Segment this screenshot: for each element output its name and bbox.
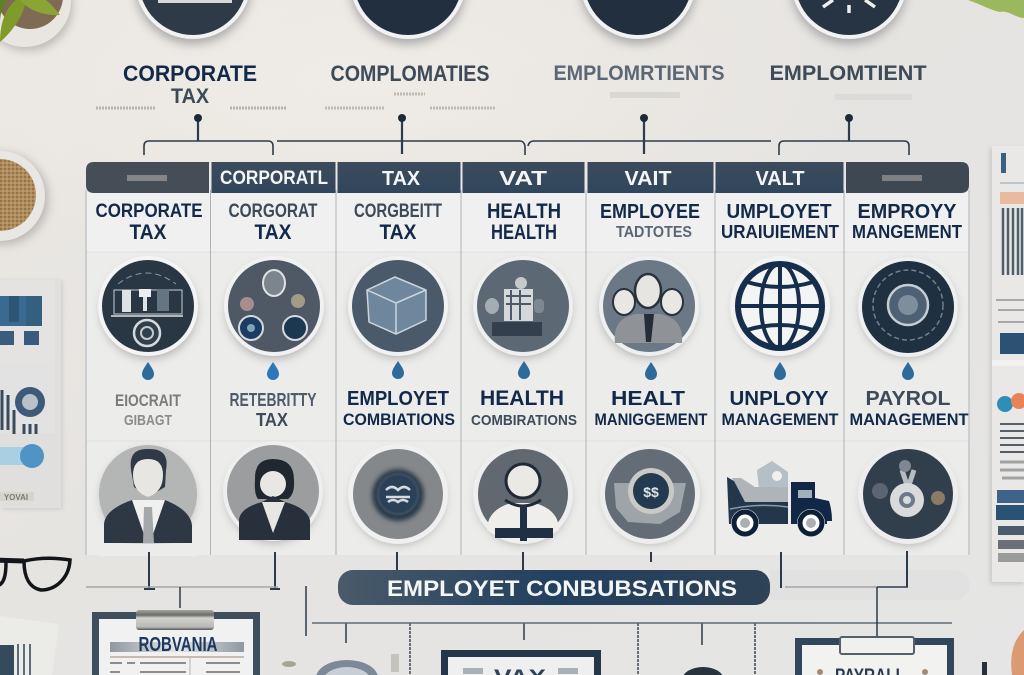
clipboard: tax bbox=[441, 650, 601, 675]
icon: top circle 1 bbox=[135, 0, 251, 44]
left side document bbox=[0, 279, 62, 509]
heading: emplomtient: EMPLOMTIENT bbox=[770, 62, 927, 85]
row 2 labels: HEALT bbox=[611, 388, 685, 410]
column titles: CORPORATE bbox=[96, 201, 202, 222]
row 2 labels: PAYROL bbox=[866, 388, 950, 410]
header row: TAX bbox=[382, 168, 421, 190]
header row bbox=[86, 162, 969, 193]
column titles: URAIUIEMENT bbox=[721, 222, 839, 242]
row 2 labels bbox=[115, 387, 969, 430]
icon: truck bbox=[727, 461, 832, 537]
header row: CORPORATL bbox=[220, 168, 328, 189]
connectors below table bbox=[86, 551, 952, 675]
icon: network circle bbox=[224, 256, 324, 358]
icon: woman bbox=[223, 441, 323, 542]
icon: man in suit bbox=[98, 445, 198, 556]
icon: plant top left bbox=[0, 0, 72, 50]
icon: bank building circle bbox=[473, 256, 573, 357]
left side document: YOVAI bbox=[4, 493, 28, 502]
icon: tools circle bbox=[858, 444, 958, 544]
icon: people circle bbox=[599, 256, 699, 357]
water drops bbox=[142, 361, 914, 380]
heading: complomaties: COMPLOMATIES bbox=[330, 61, 490, 86]
icon: hex badge circle: $$ bbox=[643, 484, 659, 500]
pale track behind banner bbox=[770, 570, 970, 600]
column titles: UMPLOYET bbox=[726, 201, 832, 223]
column titles: EMPROYY bbox=[858, 201, 957, 223]
heading: corporate tax bbox=[96, 61, 286, 108]
column titles bbox=[96, 200, 962, 244]
heading: complomaties bbox=[325, 61, 496, 108]
icon: box circle bbox=[348, 256, 448, 357]
column titles: CORGBEITT bbox=[354, 201, 442, 222]
icon: coffee cup left bbox=[0, 151, 48, 244]
table panel bbox=[86, 190, 969, 555]
column titles: TAX bbox=[380, 221, 416, 244]
row 2 labels: TAX bbox=[256, 410, 288, 430]
row 2 labels: MANAGEMENT bbox=[722, 410, 839, 429]
eyeglasses bbox=[0, 558, 70, 590]
row 2 labels: GIBAGT bbox=[124, 412, 172, 429]
row 2 labels: COMBIATIONS bbox=[343, 410, 455, 429]
row 2 labels: EMPLOYET bbox=[347, 388, 449, 410]
heading: corporate tax: CORPORATE bbox=[123, 61, 257, 86]
heading: emplomatients: EMPLOMRTIENTS bbox=[554, 62, 724, 85]
icon: building circle bbox=[98, 256, 198, 358]
header row: VAIT bbox=[624, 168, 672, 190]
icon: hex badge circle bbox=[600, 444, 700, 544]
icon: top circle 2 bbox=[350, 0, 466, 44]
column titles: TADTOTES bbox=[616, 224, 692, 241]
column titles: HEALTH bbox=[491, 221, 557, 244]
icon: top circle 4 bbox=[791, 0, 907, 44]
column titles: TAX bbox=[254, 221, 292, 244]
header row: VALT bbox=[756, 168, 804, 190]
heading: corporate tax: TAX bbox=[171, 85, 209, 108]
icon: gear badge circle bbox=[858, 257, 958, 357]
icon: person in shirt bbox=[473, 444, 573, 544]
right side documents bbox=[990, 146, 1024, 584]
row 2 labels: MANAGEMENT bbox=[850, 410, 969, 429]
row 2 labels: RETEBRITTY bbox=[230, 390, 316, 410]
banner: employee contributions: EMPLOYET CONBUBSATIONS bbox=[387, 576, 737, 601]
row 2 labels: MANIGGEMENT bbox=[594, 410, 708, 429]
column titles: CORGORAT bbox=[228, 201, 318, 222]
icon: top circle 3 bbox=[580, 0, 696, 44]
clipboard: payroll bbox=[795, 637, 954, 675]
left bottom document bbox=[0, 616, 59, 675]
clipboard: Romania bbox=[92, 610, 260, 675]
banner: employee contributions bbox=[338, 570, 770, 605]
column titles: MANGEMENT bbox=[852, 222, 962, 242]
icon: person head stub bbox=[682, 667, 724, 675]
connector tree top bbox=[144, 114, 909, 155]
column titles: EMPLOYEE bbox=[600, 201, 700, 223]
row 2 labels: HEALTH bbox=[480, 387, 564, 410]
icon: plant top right bbox=[968, 0, 1024, 18]
pen and side objects bbox=[982, 630, 1024, 675]
row 2 labels: UNPLOYY bbox=[730, 388, 829, 410]
row 2 labels: COMBIRATIONS bbox=[471, 412, 577, 429]
icon: coin badge circle bbox=[348, 444, 448, 544]
header row: VAT bbox=[499, 168, 547, 190]
column titles: HEALTH bbox=[487, 200, 561, 223]
column titles: TAX bbox=[130, 221, 166, 244]
row 2 labels: EIOCRAIT bbox=[115, 391, 181, 410]
clipboard: Romania: ROBVANIA bbox=[138, 634, 218, 656]
icon: globe stub bbox=[282, 654, 399, 675]
icon: globe bbox=[730, 256, 830, 356]
